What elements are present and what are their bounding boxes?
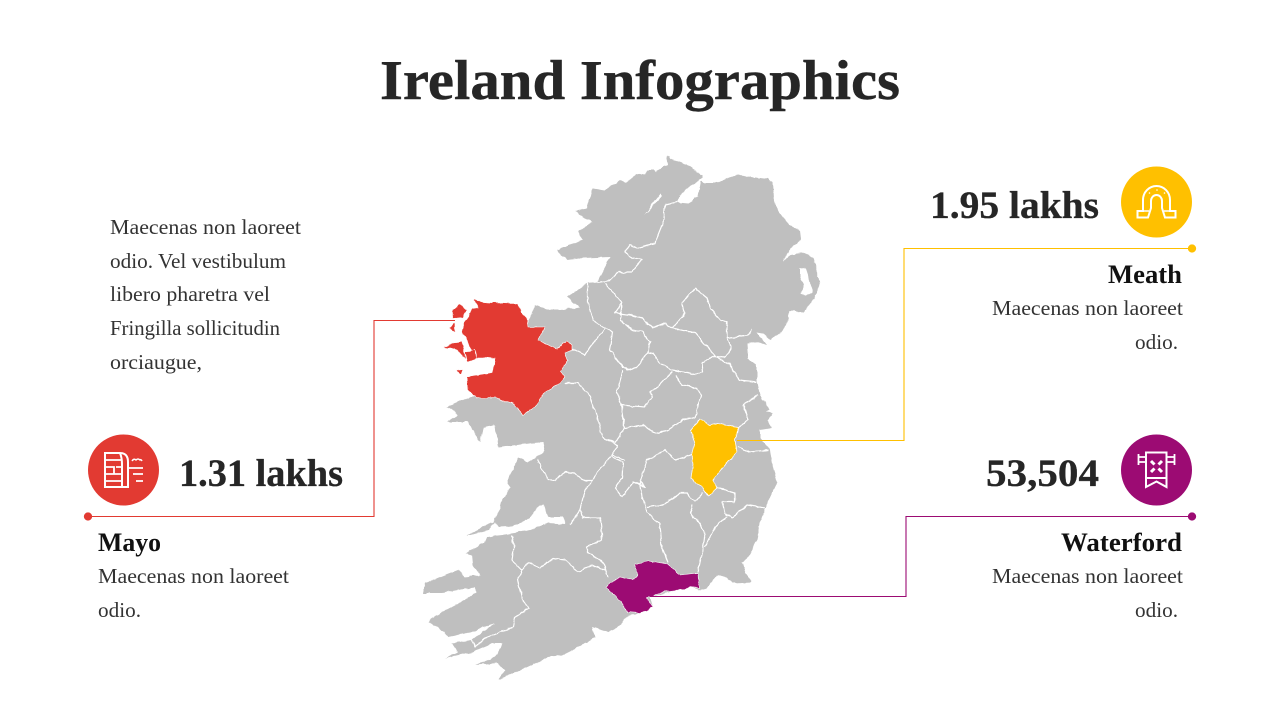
- text: Meath: odio.: [1135, 330, 1178, 354]
- icon: Waterford banner: [1121, 434, 1192, 506]
- text: Mayo: [98, 564, 289, 622]
- Shannon estuary: [467, 504, 566, 537]
- icon: Mayo building: [88, 434, 159, 506]
- text: Waterford: odio.: [1135, 598, 1178, 622]
- stat: Meath: 1.95 lakhs: [930, 184, 1099, 227]
- county: Waterford: [606, 561, 699, 613]
- description paragraph: odio. Vel vestibulum: [110, 249, 286, 273]
- icon: Meath horseshoe: [1121, 166, 1192, 238]
- description paragraph: [110, 215, 301, 374]
- description paragraph: orciaugue,: [110, 350, 202, 374]
- Strangford Lough: [800, 267, 813, 296]
- description paragraph: libero pharetra vel: [110, 282, 270, 306]
- text: Waterford: Maecenas non laoreet: [992, 564, 1183, 588]
- heading: Mayo: Mayo: [98, 528, 161, 557]
- connector: Waterford: [650, 513, 1196, 596]
- text: Mayo: Maecenas non laoreet: [98, 564, 289, 588]
- text: Meath: Maecenas non laoreet: [992, 296, 1183, 320]
- text: Meath: [992, 296, 1183, 354]
- county borders: [472, 202, 768, 647]
- county: Mayo: [443, 300, 572, 415]
- text: Mayo: odio.: [98, 598, 141, 622]
- heading: Meath: Meath: [1108, 260, 1183, 289]
- map of Ireland: [423, 156, 820, 680]
- text: Waterford: [992, 564, 1183, 622]
- description paragraph: Fringilla sollicitudin: [110, 316, 280, 340]
- heading: Waterford: Waterford: [1061, 528, 1183, 557]
- stat: Mayo: 1.31 lakhs: [179, 452, 343, 495]
- description paragraph: Maecenas non laoreet: [110, 215, 301, 239]
- connector: Meath: [737, 245, 1196, 440]
- island base shape: [423, 156, 820, 680]
- stat: Waterford: 53,504: [986, 452, 1099, 495]
- title: Ireland Infographics: [380, 50, 900, 112]
- connector: Mayo: [84, 320, 455, 520]
- county: Meath: [691, 419, 738, 496]
